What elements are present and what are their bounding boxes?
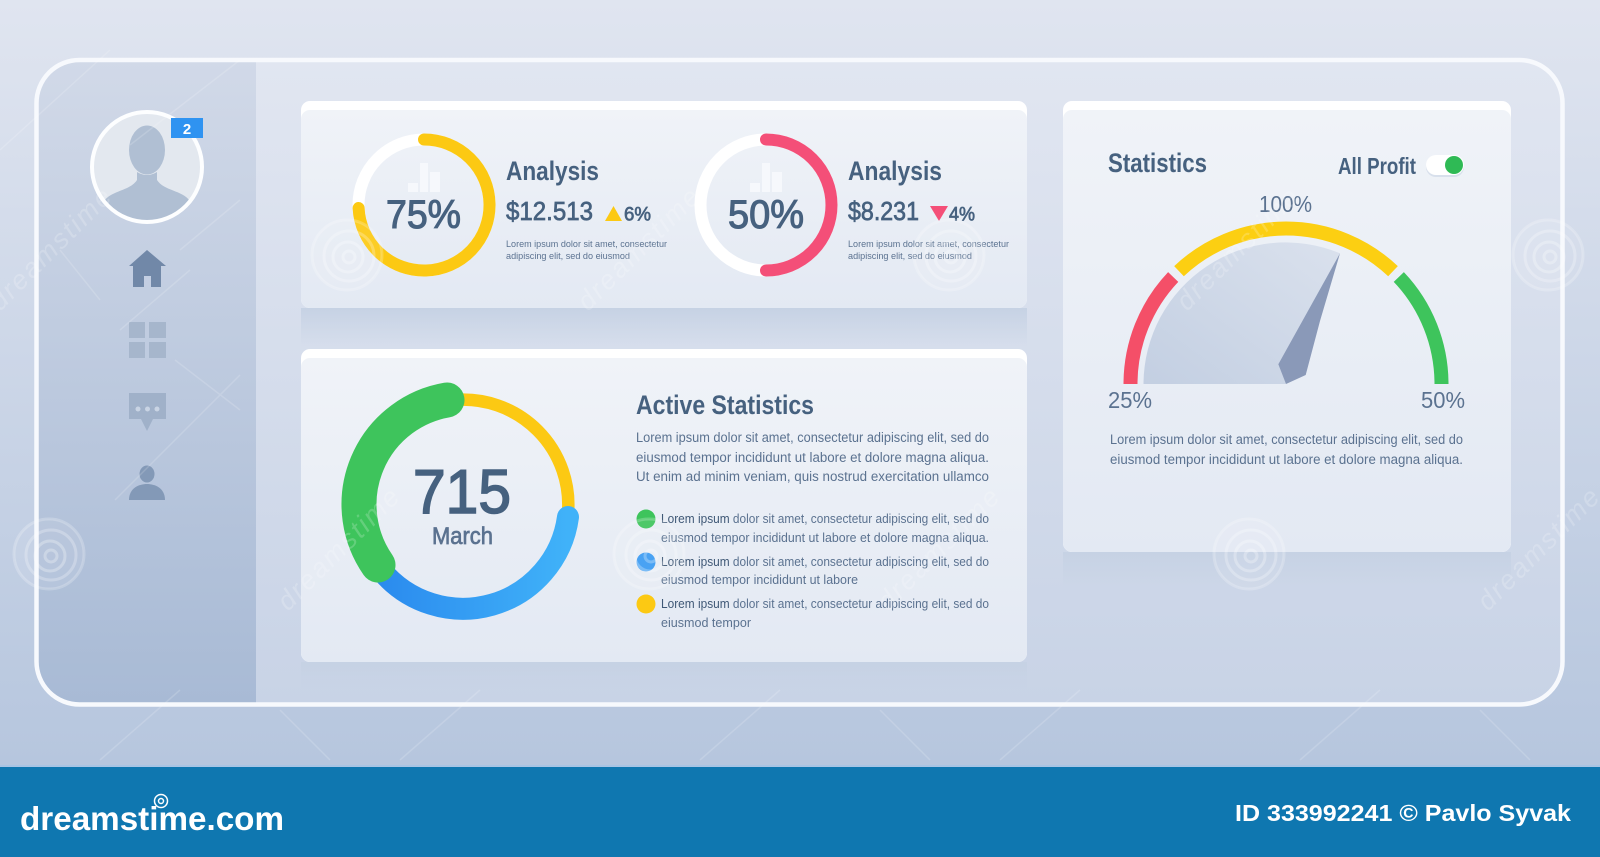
gauge description: Lorem ipsum dolor sit amet, consectetur adipiscing elit, sed do (1110, 432, 1463, 447)
toggle: all profit: All Profit (1338, 153, 1416, 179)
analysis block 2 (848, 156, 1009, 262)
legend: Lorem ipsum dolor sit amet, consectetur adipiscing elit, sed do (661, 555, 989, 569)
legend: eiusmod tempor incididunt ut labore et dolore magna aliqua. (661, 531, 989, 545)
donut chart 715: March (432, 523, 493, 550)
legend: Lorem ipsum dolor sit amet, consectetur adipiscing elit, sed do (661, 512, 989, 526)
footer logo: dreamstime.com (20, 800, 284, 837)
sidebar panel (36, 60, 256, 705)
icon: chat (129, 393, 166, 431)
legend: eiusmod tempor incididunt ut labore (661, 573, 858, 587)
analysis block 2: 4% (949, 204, 975, 226)
panel: active statistics (301, 349, 1027, 662)
analysis block 1: Lorem ipsum dolor sit amet, consectetur (506, 239, 667, 250)
notification badge: 2 (183, 121, 191, 138)
paragraph: Lorem ipsum dolor sit amet, consectetur adipiscing elit, sed do (636, 430, 989, 445)
analysis block 2: Analysis (848, 156, 942, 186)
watermark overlay: dreamstime (1170, 182, 1304, 316)
donut chart 50%: 50% (728, 193, 804, 237)
icon: grid (129, 322, 166, 358)
analysis block 2: adipiscing elit, sed do eiusmod (848, 251, 972, 262)
panel: analysis (301, 101, 1027, 308)
gauge description: eiusmod tempor incididunt ut labore et dolore magna aliqua. (1110, 452, 1463, 467)
analysis block 2: Lorem ipsum dolor sit amet, consectetur (848, 239, 1009, 250)
sidebar avatar (92, 112, 203, 224)
paragraph: eiusmod tempor incididunt ut labore et dolore magna aliqua. (636, 450, 989, 465)
legend: Lorem ipsum dolor sit amet, consectetur adipiscing elit, sed do (661, 597, 989, 611)
analysis block 1: $12.513 (506, 196, 593, 226)
dashboard frame (36, 60, 1562, 705)
paragraph: Ut enim ad minim veniam, quis nostrud exercitation ullamco (636, 469, 989, 484)
heading: active statistics: Active Statistics (636, 390, 814, 420)
panel: statistics gauge (1063, 101, 1511, 552)
donut chart 75%: 75% (386, 193, 461, 237)
footer credit: ID 333992241 © Pavlo Syvak (1235, 800, 1571, 826)
donut chart 715: 715 (413, 458, 511, 527)
analysis block 2: $8.231 (848, 196, 919, 226)
needle (1278, 253, 1340, 384)
footer bar (0, 765, 1600, 857)
gauge chart: 100% (1259, 191, 1312, 217)
donut chart 50% (700, 140, 832, 270)
gauge chart (1108, 191, 1465, 413)
heading: statistics: Statistics (1108, 148, 1207, 178)
paragraph (636, 430, 989, 484)
icon: user (129, 466, 165, 500)
card shadows (301, 308, 1511, 692)
analysis block 1 (506, 156, 667, 262)
analysis block 1: adipiscing elit, sed do eiusmod (506, 251, 630, 262)
legend (636, 510, 989, 630)
legend: eiusmod tempor (661, 616, 751, 630)
gauge description (1110, 432, 1463, 467)
analysis block 1: 6% (624, 204, 651, 226)
analysis block 1: Analysis (506, 156, 599, 186)
watermark overlay: dreamstime (571, 182, 705, 316)
donut chart 715 (359, 400, 568, 609)
icon: home (129, 250, 166, 287)
watermark overlay: dreamstime (871, 482, 1005, 616)
gauge chart: 25% (1108, 387, 1152, 413)
donut chart 75% (358, 139, 490, 270)
watermark overlay: dreamstime (271, 482, 405, 616)
gauge chart: 50% (1421, 387, 1465, 413)
